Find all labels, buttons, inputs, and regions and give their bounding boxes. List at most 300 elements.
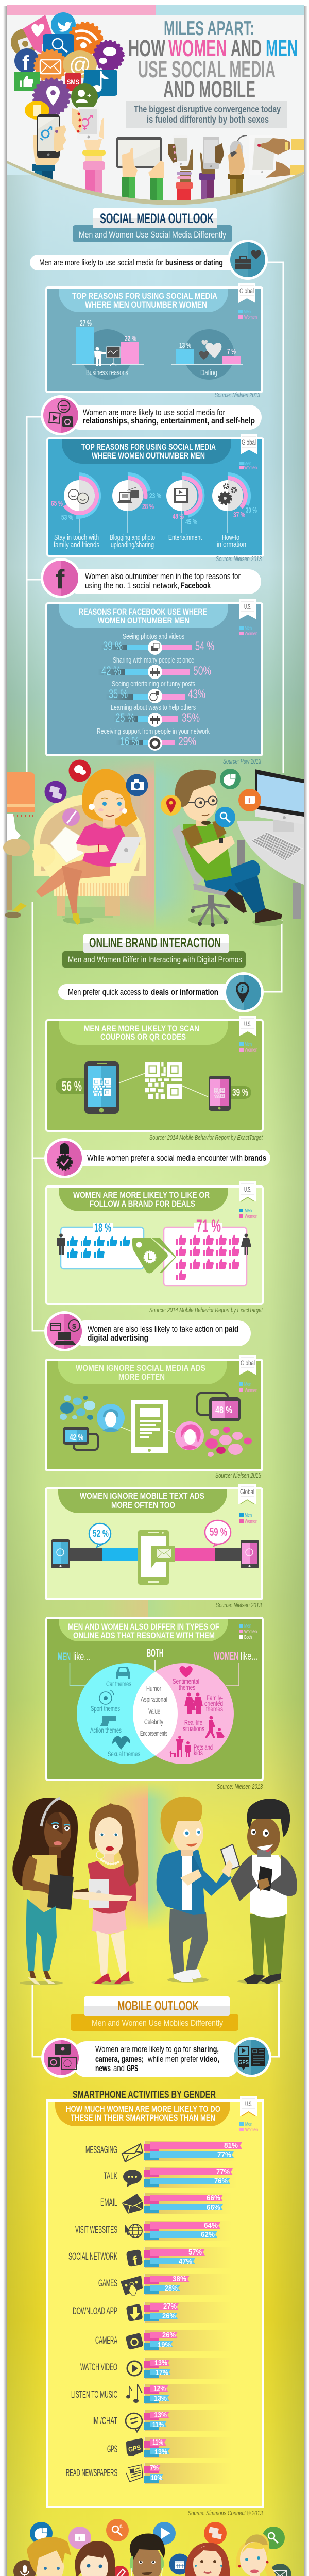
callout: women brands: brands xyxy=(244,1153,266,1163)
source: Source: Simmons Connect © 2013 xyxy=(188,2509,263,2517)
panel heading xyxy=(58,1361,227,1384)
stat: men 56 percent: 56 % xyxy=(62,1078,82,1094)
source: Source: Nielsen 2013 xyxy=(216,555,262,563)
title: AND MOBILE xyxy=(163,76,255,103)
men themes xyxy=(90,1667,140,1758)
icon: chat outline xyxy=(126,2413,142,2432)
venn headings: WOMEN xyxy=(214,1650,238,1663)
icon: SMS xyxy=(65,73,81,91)
icon: newspaper xyxy=(126,2465,143,2482)
subtitle box: is fueled differently by both sexes xyxy=(147,114,269,125)
icon: price tag xyxy=(132,1238,176,1274)
row: games xyxy=(98,2274,232,2295)
panel heading: WHERE MEN OUTNUMBER WOMEN xyxy=(85,300,207,310)
section heading: social media outlook xyxy=(73,208,232,242)
shared themes: Endorsements xyxy=(140,1729,167,1737)
row: messaging: 77% xyxy=(217,2150,231,2159)
donut: entertainment: Entertainment xyxy=(168,533,202,542)
row: learning about ways to help: 35% xyxy=(182,711,200,725)
ribbon: U.S.: U.S. xyxy=(244,602,251,611)
icon: central phone xyxy=(138,1530,169,1585)
hand with black phone xyxy=(32,114,66,179)
icon: heart xyxy=(179,1666,193,1677)
social media icon cluster xyxy=(11,12,123,123)
women themes: themes xyxy=(206,1705,223,1713)
row: camera: CAMERA xyxy=(95,2335,117,2346)
panel: women ignore mobile text ads xyxy=(46,1484,262,1599)
row: social network: 47% xyxy=(179,2257,192,2266)
panel: top reasons where men outnumber women xyxy=(46,283,262,392)
chair xyxy=(172,824,283,927)
source: Source: 2014 Mobile Behavior Report by ExactTarget xyxy=(149,1133,263,1141)
donut: how-to: 30 % xyxy=(246,506,257,515)
row: camera: 26% xyxy=(162,2331,176,2340)
icon: play circle xyxy=(127,2361,142,2376)
panel heading xyxy=(59,289,228,312)
panel: reasons for facebook use xyxy=(46,599,262,755)
icon: facebook: f xyxy=(22,52,29,75)
bar chart: dating xyxy=(171,329,243,380)
legend: Women xyxy=(245,2127,258,2133)
men side: 42 percent: 42 % xyxy=(70,1433,83,1442)
title: HOW xyxy=(128,35,165,61)
background split stripe xyxy=(103,1600,179,1617)
women themes: themes xyxy=(179,1683,195,1691)
icon: tablet with ad xyxy=(131,1400,168,1453)
panel heading: REASONS FOR FACEBOOK USE WHERE xyxy=(79,607,207,617)
icon: play xyxy=(153,2522,176,2545)
panel heading: THESE IN THEIR SMARTPHONES THAN MEN xyxy=(71,2113,215,2123)
row: receiving support: 29% xyxy=(178,735,196,749)
connector lines xyxy=(121,1427,176,1433)
panel heading xyxy=(59,1021,228,1045)
row: listen to music: 13% xyxy=(154,2394,167,2403)
icon: woman xyxy=(241,1233,251,1255)
women side: 48 percent xyxy=(175,1393,252,1457)
row: seeing photos and videos: 39 % xyxy=(103,639,123,653)
icon: gun xyxy=(100,1716,116,1726)
venn headings xyxy=(58,1647,258,1686)
icon: calendar xyxy=(169,2553,191,2575)
row: seeing photos and videos: Seeing photos and videos xyxy=(123,632,184,641)
shared themes: Value xyxy=(148,1707,160,1715)
row: seeing entertaining posts: Seeing entertaining or funny posts xyxy=(112,680,195,688)
row: visit websites: 62% xyxy=(201,2230,215,2239)
men themes: Sport themes xyxy=(91,1704,120,1713)
women themes: situations xyxy=(183,1724,204,1733)
icon: chat xyxy=(94,41,123,70)
callout: women sharing, men video: Women are more likely to go for xyxy=(95,2044,191,2054)
legend xyxy=(239,2122,258,2133)
icon: info: i xyxy=(248,796,250,804)
panel: women like or follow brand xyxy=(46,1181,263,1304)
panel heading xyxy=(58,1489,227,1513)
panel heading: MORE OFTEN TOO xyxy=(111,1500,175,1510)
hand on mouse xyxy=(228,135,247,199)
ribbon: U.S. xyxy=(239,1016,256,1036)
icon: info pin xyxy=(224,972,264,1012)
callout: 59 percent xyxy=(205,1520,231,1546)
legend: Women xyxy=(244,1629,257,1635)
room backdrop split xyxy=(98,761,190,925)
bar chart: dating: 7 % xyxy=(227,347,236,356)
row: sharing with many people: 42 % xyxy=(101,664,121,678)
men box: 18 percent xyxy=(57,1221,144,1269)
section heading: mobile outlook xyxy=(71,1996,238,2031)
title: WOMEN xyxy=(168,35,227,61)
panel heading: HOW MUCH WOMEN ARE MORE LIKELY TO DO xyxy=(66,2104,220,2114)
men themes: Action themes xyxy=(90,1726,122,1734)
donut: stay in touch xyxy=(51,474,99,549)
icon: microphone xyxy=(13,2560,36,2576)
icon: man xyxy=(57,1233,65,1255)
heading: smartphone activities by gender: SMARTPHONE ACTIVITIES BY GENDER xyxy=(73,2089,216,2100)
callout: women brands: While women prefer a social media encounter with xyxy=(87,1153,243,1163)
panel heading: MORE OFTEN xyxy=(118,1372,165,1382)
row: seeing entertaining posts: 43% xyxy=(188,687,205,701)
armchair xyxy=(32,795,146,916)
icon: facebook f xyxy=(41,558,81,598)
callout: 59 percent: 59 % xyxy=(210,1526,227,1538)
panel heading: FOLLOW A BRAND FOR DEALS xyxy=(90,1199,195,1209)
row: seeing entertaining posts xyxy=(106,680,205,703)
legend: Women xyxy=(245,1214,258,1219)
callout: women relationships: Women are more likely to use social media for xyxy=(83,408,225,417)
row: watch video: WATCH VIDEO xyxy=(80,2362,117,2373)
bar chart: business reasons: 22 % xyxy=(125,334,136,343)
row: IM / chat: IM /CHAT xyxy=(92,2416,117,2427)
donut: blogging: Blogging and photo xyxy=(110,533,155,542)
row: camera: 19% xyxy=(158,2341,171,2349)
venn headings: MEN xyxy=(58,1650,71,1663)
icon: mail xyxy=(269,2564,291,2576)
icon: globe and cursor xyxy=(125,2224,142,2238)
icon: facebook square: f xyxy=(131,2252,139,2268)
row: GPS: 11% xyxy=(152,2438,163,2447)
connector lines xyxy=(119,1073,208,1097)
icon: briefcase and heart xyxy=(228,240,268,280)
legend xyxy=(238,309,257,320)
icon: calculator xyxy=(25,101,49,123)
row: learning about ways to help: 25 % xyxy=(115,711,135,725)
row: games: 28% xyxy=(165,2284,178,2293)
panel heading xyxy=(62,439,231,464)
man in white tee xyxy=(231,1799,297,1984)
row: watch video: 13% xyxy=(154,2359,167,2367)
shared themes: Celebrity xyxy=(144,1718,163,1726)
woman with dark tablet xyxy=(12,1798,89,1985)
panel: women ignore social media ads xyxy=(46,1355,262,1470)
callout: business or dating: business or dating xyxy=(165,258,223,267)
icon: left phone xyxy=(51,1539,70,1568)
legend: Men xyxy=(245,2122,252,2127)
share bubbles xyxy=(205,1427,252,1457)
callout: women sharing, men video: sharing, xyxy=(193,2044,219,2054)
person: brunette in orange xyxy=(71,2541,116,2576)
ribbon: Global: Global xyxy=(239,286,254,295)
venn headings: like... xyxy=(241,1650,258,1663)
person: blonde man in purple xyxy=(23,2537,71,2576)
icon: facebook xyxy=(14,48,39,75)
legend: Men xyxy=(244,1382,251,1387)
callout: men prefer quick access xyxy=(58,972,264,1012)
row: seeing photos and videos: 54 % xyxy=(195,639,214,653)
icon: parents with pets and kids xyxy=(169,1736,191,1757)
row: read newspapers xyxy=(66,2463,232,2484)
shared themes: Humor xyxy=(146,1684,161,1692)
row: talk: TALK xyxy=(104,2171,117,2182)
icon: add user: + xyxy=(87,91,91,99)
callout: business or dating xyxy=(30,240,268,280)
icon: smiley, video, instagram xyxy=(41,395,81,435)
callout: women sharing, men video: video, xyxy=(200,2054,219,2064)
icon: search xyxy=(215,807,235,827)
women themes: Real-life xyxy=(184,1718,202,1726)
women side: 48 percent: 48 % xyxy=(215,1405,232,1415)
donut: stay in touch: 53 % xyxy=(61,513,73,522)
icon: card and cash register xyxy=(44,1311,84,1351)
row: social network: SOCIAL NETWORK xyxy=(68,2251,117,2262)
callout: men prefer quick access: Men prefer quick access to xyxy=(68,987,148,997)
row: messaging: 81% xyxy=(224,2141,238,2150)
callout: women sharing, men video: GPS xyxy=(127,2063,138,2073)
row: listen to music: LISTEN TO MUSIC xyxy=(71,2389,117,2400)
subtitle box xyxy=(126,101,287,128)
person: man with headphones xyxy=(116,2533,180,2576)
hands holding devices xyxy=(32,107,304,205)
row: messaging: MESSAGING xyxy=(85,2145,117,2156)
panel: online ads venn diagram xyxy=(46,1618,263,1780)
icon: music xyxy=(82,70,117,113)
donut: stay in touch: family and friends xyxy=(54,540,99,549)
row: sharing with many people xyxy=(98,656,211,679)
row: IM / chat: 13% xyxy=(154,2411,167,2419)
row: download app: 26% xyxy=(162,2312,176,2320)
section heading: online brand interaction xyxy=(62,934,246,968)
legend: Women xyxy=(244,465,257,471)
icon: chat bubble xyxy=(123,2170,142,2187)
row: games: GAMES xyxy=(98,2278,117,2289)
pillow xyxy=(50,827,83,863)
row: talk xyxy=(104,2167,237,2188)
icon: music notes xyxy=(126,2384,142,2403)
source: Source: Pew 2013 xyxy=(223,757,262,765)
row: social network: 57% xyxy=(188,2248,202,2257)
icon: right phone xyxy=(241,1540,259,1568)
callout: business or dating: Men are more likely to use social media for xyxy=(39,258,163,267)
icon: add user xyxy=(71,83,98,110)
section heading: social media outlook: Men and Women Use Social Media Differently xyxy=(79,230,226,240)
venn circles xyxy=(77,1663,234,1764)
icon: car xyxy=(116,1667,130,1679)
share bubbles xyxy=(60,1395,95,1420)
icons: pink thumbs xyxy=(176,1235,239,1280)
connector lines xyxy=(27,262,283,2057)
callout: men prefer quick access: deals or information xyxy=(151,987,218,997)
men themes: Sexual themes xyxy=(108,1750,140,1758)
row: GPS xyxy=(107,2437,232,2458)
row: talk: 76% xyxy=(214,2177,228,2185)
source: Source: Nielsen 2013 xyxy=(217,1783,263,1790)
donut: blogging: uploading/sharing xyxy=(111,540,154,549)
callout: women brands xyxy=(44,1138,270,1178)
donut: how-to xyxy=(212,474,257,549)
icon: like xyxy=(14,72,40,91)
row: email: 66% xyxy=(207,2194,220,2202)
donut: how-to: How-to xyxy=(222,533,239,542)
icon: video, news and GPS: GPS xyxy=(238,2059,249,2066)
callout: women relationships: relationships, sharing, entertainment, and self-help xyxy=(83,416,255,426)
panel heading: TOP REASONS FOR USING SOCIAL MEDIA xyxy=(72,291,217,301)
row: email: EMAIL xyxy=(100,2197,117,2208)
icon: film strip xyxy=(174,488,188,503)
row: download app xyxy=(73,2302,232,2323)
icon: download arrow xyxy=(126,2304,143,2321)
man figure xyxy=(175,770,282,923)
callout: 52 percent xyxy=(89,1523,111,1547)
ribbon: U.S. xyxy=(240,2096,257,2116)
row: visit websites xyxy=(75,2221,232,2241)
hero: white dome header xyxy=(7,5,304,200)
icon: gears xyxy=(219,484,236,504)
women box: 71 percent: 71 % xyxy=(196,1216,221,1236)
donut: how-to: 37 % xyxy=(233,511,245,519)
icon: facebook square xyxy=(126,2249,143,2268)
icon: family xyxy=(184,1693,203,1714)
icon: pencil xyxy=(111,2566,129,2576)
row: listen to music xyxy=(71,2384,232,2404)
section heading: mobile outlook: MOBILE OUTLOOK xyxy=(117,1998,199,2013)
icon: pie chart xyxy=(220,769,241,789)
venn headings: BOTH xyxy=(147,1647,163,1659)
section heading: online brand interaction: ONLINE BRAND INTERACTION xyxy=(89,935,221,951)
legend xyxy=(239,1382,258,1394)
donut: blogging: 23 % xyxy=(149,492,161,500)
stat: women 39 percent: 39 % xyxy=(232,1087,248,1098)
icon: twitter xyxy=(51,12,76,37)
panel heading: WOMEN IGNORE MOBILE TEXT ADS xyxy=(80,1491,204,1501)
women themes: kids xyxy=(194,1749,203,1757)
callout: women relationships xyxy=(41,395,262,435)
row: email xyxy=(100,2193,232,2214)
callout: women sharing, men video: and xyxy=(113,2063,125,2073)
row: messaging xyxy=(85,2141,242,2162)
callout: women facebook: Women also outnumber men in the top reasons for xyxy=(85,571,241,581)
women box: 71 percent xyxy=(164,1216,251,1286)
icon: pie chart xyxy=(30,2522,53,2545)
icon: two smileys xyxy=(68,489,89,504)
panel: top reasons where women outnumber men xyxy=(47,434,263,556)
panel heading: MEN ARE MORE LIKELY TO SCAN xyxy=(84,1024,199,1033)
row: watch video: 17% xyxy=(156,2368,168,2377)
legend xyxy=(239,461,257,471)
panel heading xyxy=(55,2102,230,2126)
ribbon: U.S.: U.S. xyxy=(244,1185,251,1193)
donut: stay in touch: 65 % xyxy=(51,499,63,508)
donut: blogging xyxy=(110,474,161,549)
icon: games and camera xyxy=(41,2038,81,2078)
icon: presenter and chart xyxy=(94,347,120,366)
ribbon: U.S.: U.S. xyxy=(244,1020,251,1028)
row: download app: 27% xyxy=(163,2302,177,2311)
icon: at sign xyxy=(63,50,97,78)
row: read newspapers: READ NEWSPAPERS xyxy=(66,2468,117,2479)
panel heading xyxy=(59,1188,228,1211)
row: camera xyxy=(95,2330,232,2351)
icon: SMS: SMS xyxy=(67,78,79,86)
women themes: Pets and xyxy=(194,1743,213,1751)
icon: dictionary search: a xyxy=(119,2523,123,2529)
legend: Men xyxy=(245,625,252,631)
legend: Men xyxy=(244,1623,251,1629)
icon: GPS badge: GPS xyxy=(128,2444,141,2453)
row: listen to music: 12% xyxy=(153,2384,166,2393)
man in blue jacket xyxy=(157,1797,239,1983)
illustration: five people around table xyxy=(23,2533,278,2576)
row: download app: DOWNLOAD APP xyxy=(73,2306,117,2317)
panel heading: WHERE WOMEN OUTNUMBER MEN xyxy=(92,451,205,461)
panel heading xyxy=(59,604,228,628)
woman with white tablet xyxy=(73,1803,139,1985)
desk and computer xyxy=(237,769,304,919)
icon: chat xyxy=(69,759,91,782)
callout: women facebook: Facebook xyxy=(181,581,211,590)
panel heading: TOP REASONS FOR USING SOCIAL MEDIA xyxy=(81,442,216,452)
icon: video, news and GPS xyxy=(231,2037,271,2077)
donut: entertainment xyxy=(166,474,202,542)
legend xyxy=(239,1513,258,1524)
row: learning about ways to help: Learning about ways to help others xyxy=(111,703,196,712)
callout: women sharing, men video: while men prefer xyxy=(147,2054,198,2064)
ribbon: U.S.: U.S. xyxy=(245,2099,252,2108)
icon: camera xyxy=(126,774,148,796)
donut: entertainment: 48 % xyxy=(173,512,184,521)
icon: card and cash register: $ xyxy=(72,1322,76,1330)
row: seeing photos and videos xyxy=(100,632,214,655)
ribbon: Global: Global xyxy=(241,1359,255,1367)
row: email: 66% xyxy=(207,2203,220,2212)
icon: email xyxy=(35,50,66,81)
woman figure xyxy=(12,769,142,925)
icon: instagram xyxy=(11,29,38,56)
panel heading: WOMEN ARE MORE LIKELY TO LIKE OR xyxy=(73,1190,210,1200)
legend: Men xyxy=(245,1513,252,1518)
row: GPS: GPS xyxy=(107,2444,117,2455)
dome edge xyxy=(7,161,304,205)
icon: couple xyxy=(112,1736,130,1750)
legend: Women xyxy=(245,1047,258,1053)
icon: search xyxy=(43,34,74,57)
ribbon: U.S. xyxy=(239,1181,256,1202)
hands on big tablet xyxy=(252,138,304,178)
ribbon: Global: Global xyxy=(240,1487,254,1496)
icon: location xyxy=(34,79,69,114)
icon: info xyxy=(68,2527,91,2549)
title xyxy=(128,18,298,103)
icon: camera xyxy=(125,2333,144,2350)
donut: stay in touch: Stay in touch with xyxy=(54,533,99,542)
icon: large phone xyxy=(84,1061,119,1114)
section heading: online brand interaction: Men and Women Differ in Interacting with Digital Promos xyxy=(68,955,242,964)
row: IM / chat xyxy=(92,2410,232,2432)
row: sharing with many people: Sharing with many people at once xyxy=(113,656,194,665)
women themes: oriented xyxy=(204,1699,223,1707)
background split stripe xyxy=(106,1784,176,1928)
bar chart: business reasons: 27 % xyxy=(80,319,92,328)
icon: at sign: @ xyxy=(69,53,91,77)
ribbon: Global: Global xyxy=(242,438,256,446)
brown hand with grey phone xyxy=(199,137,224,200)
